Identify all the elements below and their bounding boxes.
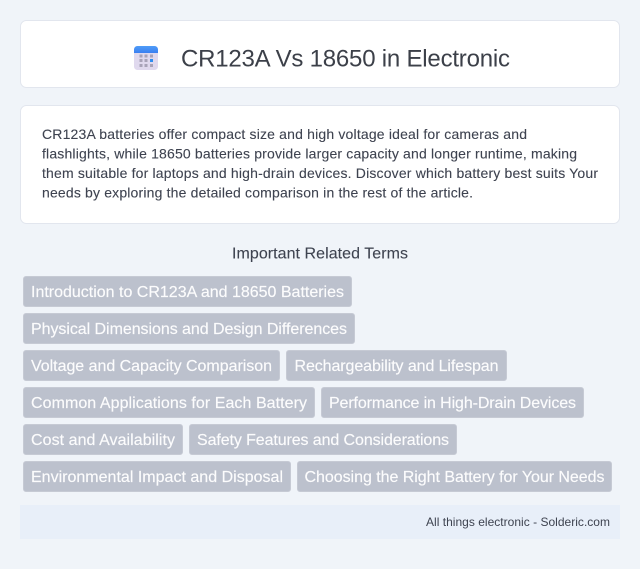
tag: safety — [190, 424, 456, 454]
title: CR123A Vs 18650 in Electronic — [181, 46, 510, 72]
tag: choosing: Choosing the Right Battery for Your Needs — [304, 469, 604, 486]
tag: voltage and capacity: Voltage and Capacity Comparison — [31, 358, 272, 375]
header panel — [20, 20, 620, 88]
icon: calendar grid — [134, 46, 158, 70]
tag: cost — [24, 424, 182, 454]
tag: performance — [322, 388, 584, 418]
tag: performance: Performance in High-Drain Devices — [329, 395, 576, 412]
footer — [20, 505, 620, 539]
tag: common applications — [24, 388, 314, 418]
tag: rechargeability: Rechargeability and Lifespan — [294, 358, 498, 375]
tag: safety: Safety Features and Considerations — [197, 432, 449, 449]
footer: All things electronic - Solderic.com — [426, 515, 610, 529]
panel: intro text: them suitable for laptops and high-drain devices. Discover which battery best suits Your — [42, 165, 598, 181]
panel: intro text: needs by exploring the detailed comparison in the rest of the article. — [42, 184, 473, 200]
tag: choosing — [298, 462, 612, 492]
tag: environmental — [24, 462, 290, 492]
tag list — [24, 276, 612, 492]
tag: rechargeability — [286, 350, 506, 380]
tag: common applications: Common Applications for Each Battery — [31, 395, 307, 412]
panel: intro text — [20, 106, 620, 224]
tag: environmental: Environmental Impact and Disposal — [31, 469, 283, 486]
tag: physical dimensions: Physical Dimensions and Design Differences — [31, 321, 347, 338]
tag: introduction — [24, 276, 352, 306]
tag: cost: Cost and Availability — [31, 432, 175, 449]
tag: physical dimensions — [24, 314, 354, 344]
panel: intro text: flashlights, while 18650 batteries provide larger capacity and longer runtime, making — [42, 146, 577, 162]
tag: introduction: Introduction to CR123A and 18650 Batteries — [31, 284, 344, 301]
panel: intro text: CR123A batteries offer compact size and high voltage ideal for cameras and — [42, 126, 527, 142]
tag: voltage and capacity — [24, 350, 280, 380]
heading: important related terms: Important Related Terms — [232, 246, 408, 262]
